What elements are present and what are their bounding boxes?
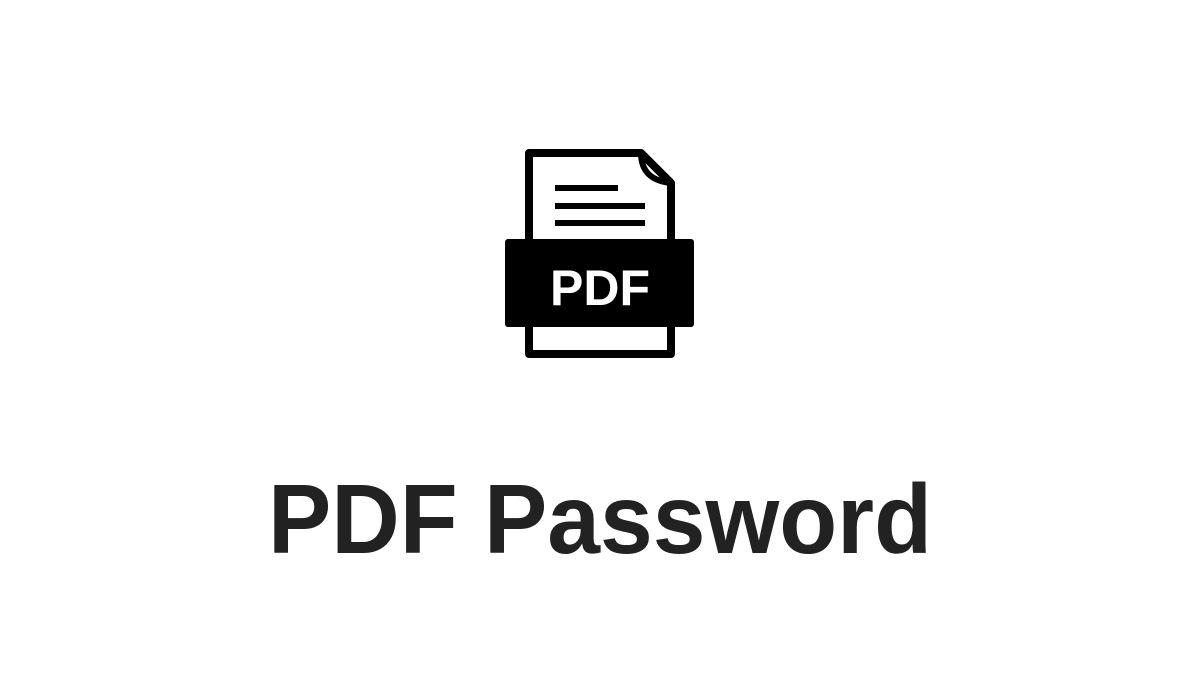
title: PDF Password bbox=[268, 464, 932, 574]
icon: PDF document bbox=[505, 153, 694, 354]
icon: PDF document: PDF bbox=[550, 260, 650, 316]
